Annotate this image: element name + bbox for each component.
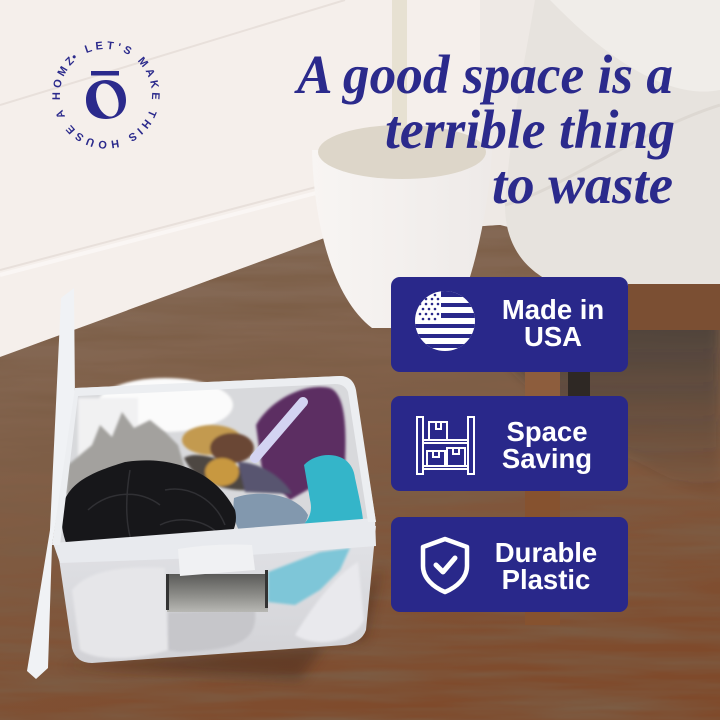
chair legs	[525, 370, 590, 625]
planter pot	[312, 0, 492, 328]
crochet hook	[255, 402, 303, 458]
wood floor	[0, 225, 720, 720]
black yarn	[61, 460, 236, 552]
box interior	[56, 376, 376, 548]
logo badge	[52, 41, 160, 149]
box lid	[27, 288, 75, 679]
circular slogan: • LET'S MAKE THIS HOUSE A HOMZ	[52, 41, 160, 149]
label: Durable	[495, 537, 597, 568]
title: A good space is a	[294, 44, 673, 105]
white yarn	[78, 378, 233, 460]
icon: us flag	[415, 291, 475, 351]
grey fluffy yarn	[66, 412, 186, 495]
box front wall	[58, 526, 376, 663]
chair wood frame	[628, 284, 720, 330]
label: Space	[506, 416, 588, 447]
logo mark	[86, 71, 126, 119]
label: USA	[524, 321, 582, 352]
shadow under chair	[490, 290, 720, 500]
icon: shield with check	[423, 539, 467, 592]
title: to waste	[492, 154, 673, 215]
box shadow	[60, 565, 382, 680]
title: terrible thing	[385, 99, 675, 160]
blue hank	[233, 494, 308, 545]
purple yarn	[256, 387, 346, 500]
panel: space saving	[391, 396, 628, 491]
yarn seen through front	[72, 548, 364, 658]
teal yarn	[278, 455, 363, 545]
label: Plastic	[502, 564, 590, 595]
gold and brown hank	[182, 425, 292, 494]
panel: made in usa	[391, 277, 628, 372]
storage box	[27, 288, 382, 680]
box rim	[53, 518, 376, 563]
label: Saving	[502, 443, 592, 474]
icon: shelf with boxes	[417, 417, 474, 474]
panel: durable plastic	[391, 517, 628, 612]
label: Made in	[502, 294, 604, 325]
title	[294, 44, 675, 215]
metal latch	[166, 544, 268, 612]
armchair	[505, 0, 720, 330]
